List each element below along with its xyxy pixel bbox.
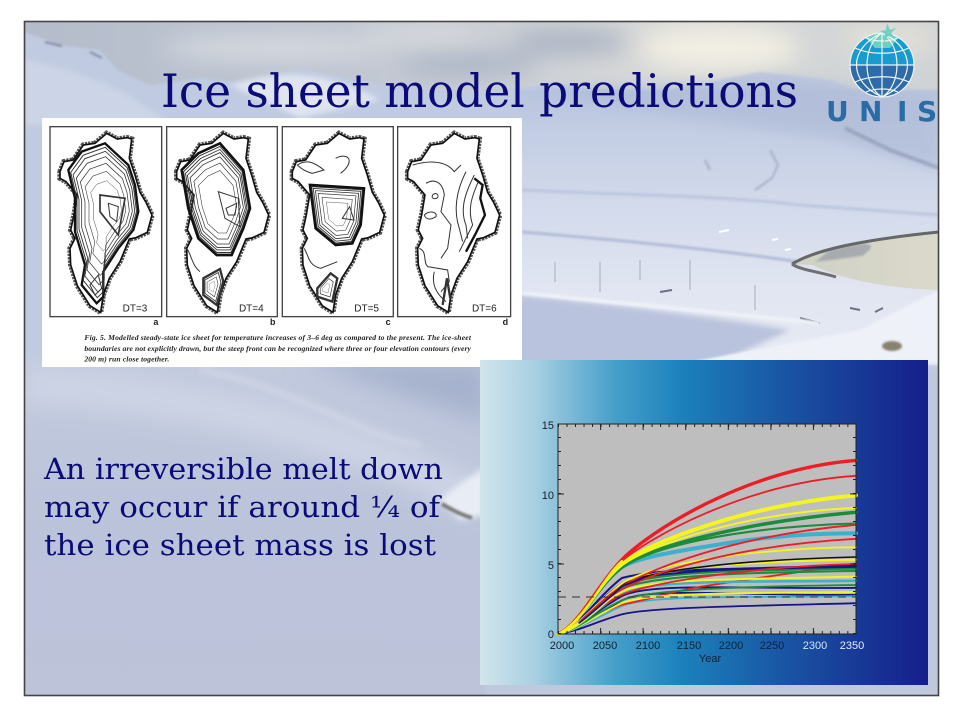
y axis labels: 10 (542, 490, 554, 502)
logo: UNIS globe (826, 23, 937, 128)
y axis labels: 15 (542, 420, 554, 432)
text block: melt down statement: may occur if around ¼ of (44, 491, 443, 524)
y axis labels: 0 (548, 629, 554, 641)
figure caption: boundaries are not explicitly drawn, but the steep front can be recognized where three or four elevation contours (every (84, 344, 472, 353)
x axis labels: 2000 (550, 640, 574, 652)
panel: sea level chart on gradient (480, 360, 928, 685)
text block: melt down statement: An irreversible melt down (43, 453, 443, 486)
figure: modelled ice sheets (42, 118, 522, 367)
map b: DT=4: DT=4 (239, 304, 264, 315)
title: Ice sheet model predictions (161, 64, 798, 118)
model curves (558, 460, 856, 634)
y axis labels: 5 (548, 560, 554, 572)
map d: DT=6: d (503, 317, 508, 327)
plot area (558, 424, 856, 634)
text block: melt down statement: the ice sheet mass is lost (44, 529, 437, 562)
map b: DT=4 (167, 127, 277, 327)
map d: DT=6 (398, 127, 511, 327)
map b: DT=4: b (270, 317, 276, 327)
x axis labels (550, 640, 864, 665)
map d: DT=6: DT=6 (472, 304, 497, 315)
figure caption (83, 333, 472, 364)
x axis labels: Year (699, 653, 721, 665)
map a: DT=3: a (153, 317, 159, 327)
text block: melt down statement (43, 453, 443, 562)
figure caption: 200 m) run close together. (83, 355, 169, 364)
x axis labels: 2100 (636, 640, 660, 652)
x axis labels: 2200 (719, 640, 743, 652)
x axis labels: 2300 (803, 640, 827, 652)
map c: DT=5: DT=5 (354, 304, 379, 315)
lake (792, 232, 939, 290)
map a: DT=3: DT=3 (123, 304, 148, 315)
dashed threshold line (558, 596, 856, 598)
figure caption: Fig. 5. Modelled steady-state ice sheet for temperature increases of 3–6 deg as compared to the present. The ice-sheet (84, 333, 472, 342)
y axis labels (542, 420, 554, 641)
logo: UNIS globe: UNIS (826, 95, 937, 128)
map a: DT=3 (50, 127, 162, 327)
x axis labels: 2350 (840, 640, 864, 652)
x axis labels: 2250 (760, 640, 784, 652)
map c: DT=5 (282, 127, 393, 327)
x axis labels: 2150 (677, 640, 701, 652)
map c: DT=5: c (386, 317, 391, 327)
x axis labels: 2050 (593, 640, 617, 652)
axes and ticks (558, 424, 856, 634)
